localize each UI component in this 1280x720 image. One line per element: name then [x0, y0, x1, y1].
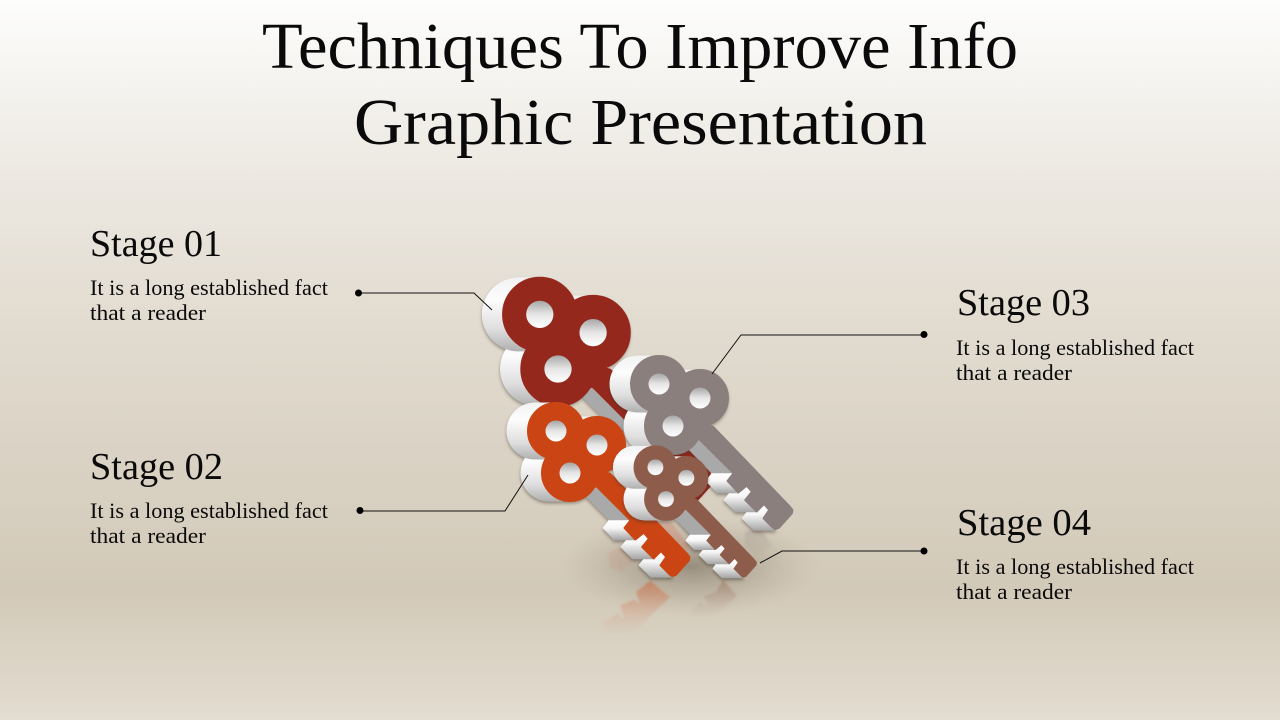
key: brown (stage 04) [613, 446, 756, 578]
key: grey (stage 03) [610, 356, 793, 530]
title [262, 10, 1018, 159]
brown key face [634, 446, 756, 577]
red key extrusion [482, 277, 636, 430]
panel: stage 04 [956, 502, 1194, 604]
title: Graphic Presentation [354, 86, 927, 159]
stage 01 text: that a reader [90, 300, 207, 325]
floor shadow [560, 516, 820, 616]
stage 03 text: It is a long established fact [956, 335, 1194, 360]
brown key extrusion [613, 446, 743, 578]
red key face [503, 277, 713, 503]
title: Techniques To Improve Info [262, 10, 1018, 83]
grey key extrusion [610, 356, 775, 530]
connector: stage 03 [712, 331, 928, 374]
key: orange (stage 02) [506, 402, 690, 577]
key: red (stage 01) [482, 277, 713, 503]
stage 03 heading: Stage 03 [957, 282, 1090, 324]
connector: stage 02 [356, 475, 528, 514]
stage 02 text: It is a long established fact [90, 498, 328, 523]
stage 02 heading: Stage 02 [90, 446, 223, 488]
orange key extrusion [506, 402, 672, 577]
panel: stage 02 [90, 446, 328, 548]
stage 01 heading: Stage 01 [90, 223, 222, 265]
stage 04 text: that a reader [956, 579, 1073, 604]
panel: stage 03 [956, 282, 1194, 385]
stage 04 text: It is a long established fact [956, 554, 1194, 579]
panel: stage 01 [90, 223, 328, 325]
stage 02 text: that a reader [90, 523, 207, 548]
stage 01 text: It is a long established fact [90, 275, 328, 300]
connector: stage 01 [355, 290, 492, 310]
connector: stage 04 [760, 548, 928, 563]
stage 03 text: that a reader [956, 360, 1073, 385]
stage 04 heading: Stage 04 [957, 502, 1091, 544]
grey key face [630, 356, 793, 529]
orange key face [528, 402, 690, 576]
reflections of key tips [603, 522, 772, 634]
